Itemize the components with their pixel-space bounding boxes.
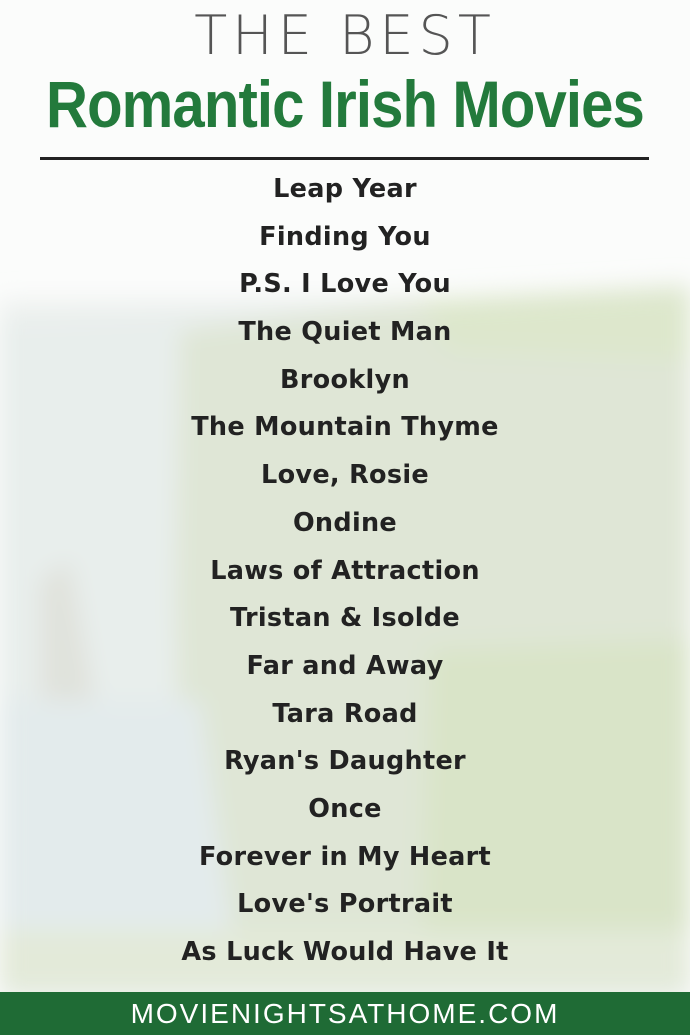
movie list: P.S. I Love You: [239, 269, 451, 299]
movie list: Far and Away: [246, 651, 444, 681]
title: THE BEST: THE BEST: [194, 4, 496, 67]
movie list: As Luck Would Have It: [181, 937, 509, 967]
footer banner: [0, 992, 690, 1035]
movie list: Brooklyn: [280, 365, 410, 395]
movie list: Finding You: [259, 222, 431, 252]
movie list: Love, Rosie: [261, 460, 429, 490]
movie list: Tara Road: [272, 699, 418, 729]
movie list: Ryan's Daughter: [224, 746, 466, 776]
title: Romantic Irish Movies: Romantic Irish Movies: [46, 67, 644, 141]
movie list: The Mountain Thyme: [191, 412, 499, 442]
movie list: Once: [308, 794, 382, 824]
movie list: Leap Year: [273, 174, 417, 204]
movie list: Love's Portrait: [237, 889, 453, 919]
movie list: [181, 174, 509, 967]
movie list: Ondine: [293, 508, 397, 538]
footer banner: MOVIENIGHTSATHOME.COM: [131, 998, 559, 1029]
movie list: The Quiet Man: [238, 317, 452, 347]
movie list: Laws of Attraction: [210, 556, 480, 586]
movie list: Forever in My Heart: [199, 842, 491, 872]
movie list: Tristan & Isolde: [230, 603, 460, 633]
